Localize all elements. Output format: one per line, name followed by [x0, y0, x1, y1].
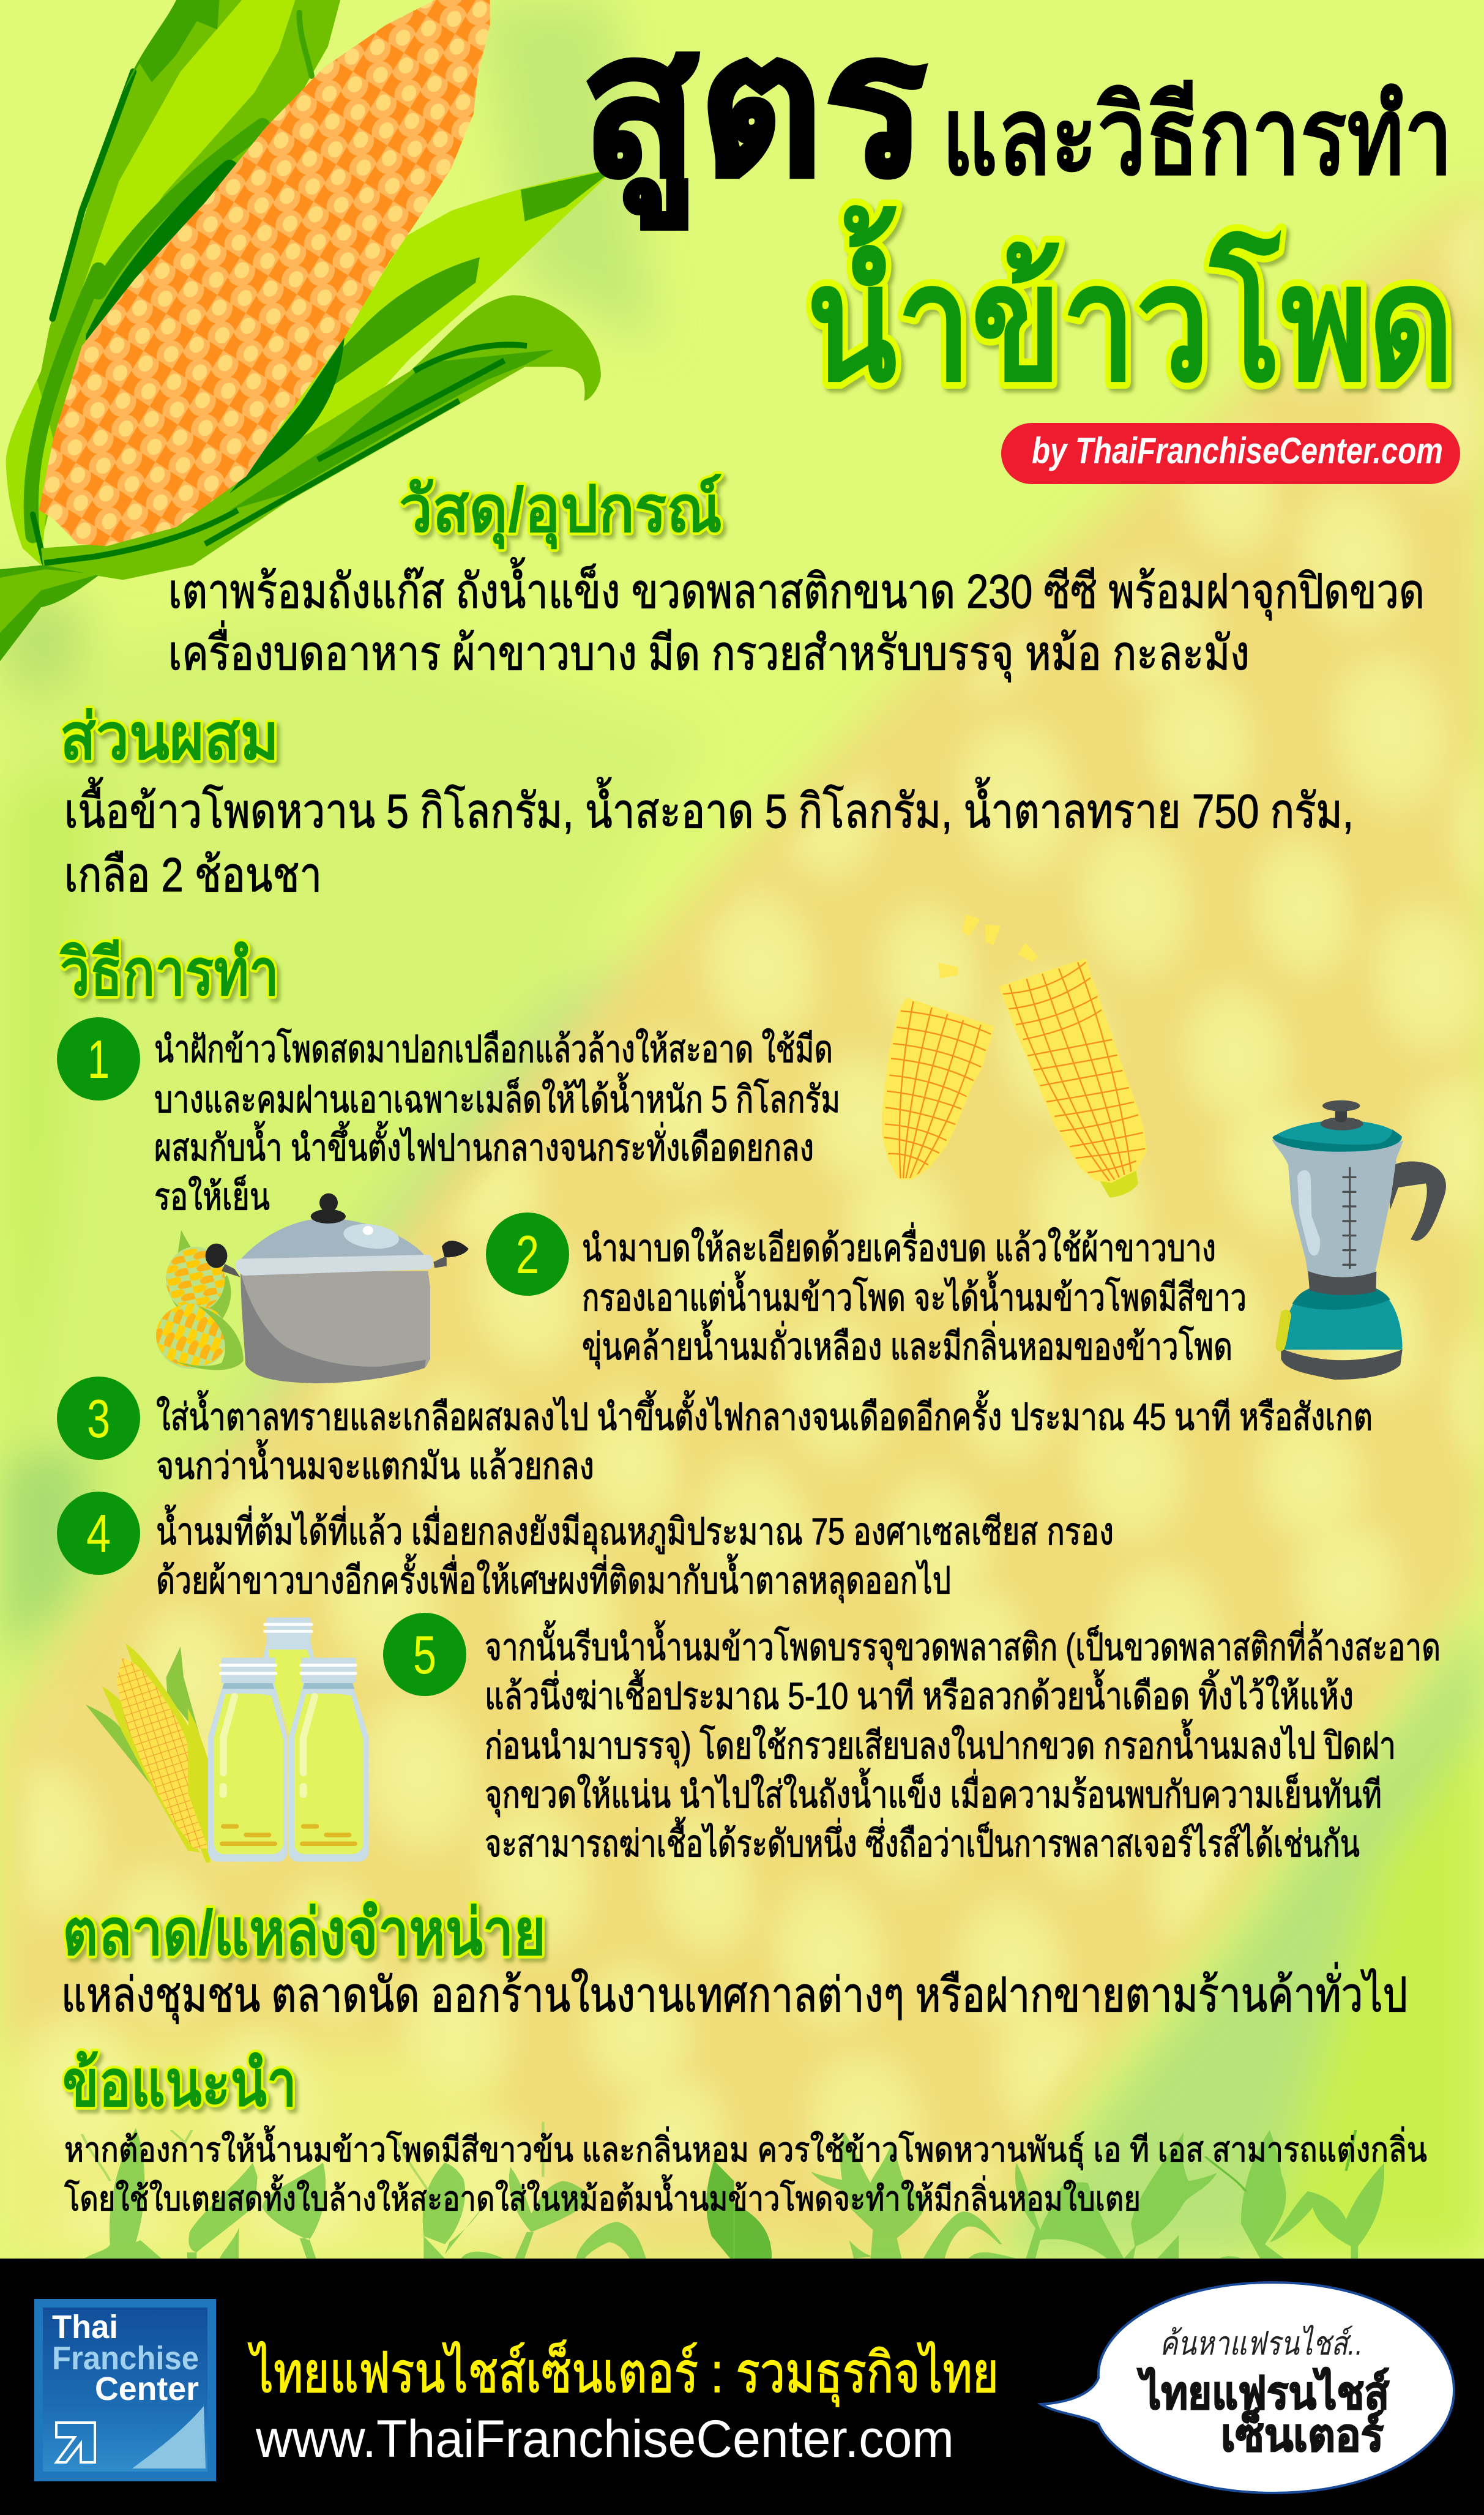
step 4 text: น้ำนมที่ต้มได้ที่แล้ว เมื่อยกลงยังมีอุณหภูมิประมาณ 75 องศาเซลเซียส กรอง	[156, 1504, 1114, 1554]
icon: pot with corn	[156, 1194, 469, 1383]
footer slogan: ไทยแฟรนไชส์เซ็นเตอร์ : รวมธุรกิจไทย	[247, 2339, 999, 2407]
step 5 badge	[383, 1613, 466, 1696]
corn behind pot	[156, 1230, 244, 1370]
corn piece right	[1001, 960, 1146, 1198]
step 4 badge	[57, 1492, 140, 1575]
step 4 badge: 4	[86, 1503, 111, 1564]
dark husk strips	[31, 13, 311, 563]
footer panel	[0, 2259, 1484, 2515]
text: ingredients: เกลือ 2 ช้อนชา	[64, 848, 322, 902]
plants right	[734, 2130, 1384, 2259]
step 2 text: ขุ่นคล้ายน้ำนมถั่วเหลือง และมีกลิ่นหอมของข้าวโพด	[582, 1320, 1232, 1369]
step 1 badge: 1	[88, 1029, 110, 1089]
heading: equipment: วัสดุ/อุปกรณ์	[399, 474, 722, 550]
husk and cob	[86, 1643, 210, 1863]
step 3 text: จนกว่าน้ำนมจะแตกมัน แล้วยกลง	[156, 1439, 594, 1487]
icon: blender	[1272, 1101, 1446, 1380]
step 1 badge	[57, 1017, 140, 1101]
step 2 text: นำมาบดให้ละเอียดด้วยเครื่องบด แล้วใช้ผ้าขาวบาง	[582, 1222, 1216, 1269]
step 1	[57, 1017, 840, 1217]
step 2 text	[582, 1222, 1247, 1369]
icon: cut corn	[883, 914, 1146, 1198]
speech bubble: ไทยแฟรนไชส์	[1137, 2366, 1390, 2418]
byline badge	[1001, 423, 1460, 484]
step 3	[57, 1377, 1373, 1487]
text: equipment	[168, 557, 1425, 682]
heading: ingredients: ส่วนผสม	[60, 701, 279, 773]
logo	[34, 2299, 216, 2481]
step 2	[486, 1213, 1247, 1369]
logo: Franchise	[52, 2340, 199, 2377]
loose kernels	[938, 914, 1038, 978]
speech bubble: เซ็นเตอร์	[1221, 2408, 1384, 2461]
step 2 text: กรองเอาแต่น้ำนมข้าวโพด จะได้น้ำนมข้าวโพดมีสีขาว	[582, 1271, 1247, 1318]
bottle 1	[208, 1657, 288, 1862]
footer url: www.ThaiFranchiseCenter.com	[255, 2410, 954, 2468]
top dark leaf	[123, 0, 219, 93]
text: equipment: เครื่องบดอาหาร ผ้าขาวบาง มีด กรวยสำหรับบรรจุ หม้อ กะละมัง	[168, 621, 1250, 682]
bottle 2	[289, 1657, 369, 1862]
step 1 text: นำฝักข้าวโพดสดมาปอกเปลือกแล้วล้างให้สะอาด ใช้มีด	[154, 1028, 833, 1070]
step 5 text	[485, 1620, 1441, 1864]
icon: corn and bottles	[86, 1618, 369, 1863]
step 3 text	[156, 1390, 1373, 1487]
step 3 badge	[57, 1377, 140, 1460]
text: advice: โดยใช้ใบเตยสดทั้งใบล้างให้สะอาดใส่ในหม้อต้มน้ำนมข้าวโพดจะทำให้มีกลิ่นหอมใบเตย	[64, 2175, 1141, 2218]
step 4 text: ด้วยผ้าขาวบางอีกครั้งเพื่อให้เศษผงที่ติดมากับน้ำตาลหลุดออกไป	[156, 1553, 951, 1603]
back bottle	[263, 1618, 314, 1736]
step 2 badge: 2	[516, 1224, 539, 1285]
step 2 badge	[486, 1213, 569, 1296]
corn piece left	[883, 1000, 993, 1179]
step 5	[383, 1613, 1441, 1864]
text: advice	[64, 2126, 1427, 2218]
logo: Thai	[52, 2309, 118, 2345]
title line 1: สูตร	[581, 0, 927, 230]
left husk	[6, 0, 340, 544]
speech bubble	[1041, 2282, 1454, 2493]
step 3 badge: 3	[87, 1388, 110, 1449]
heading: method: วิธีการทำ	[59, 937, 279, 1009]
front leaf	[229, 169, 615, 493]
plants left	[82, 2122, 734, 2259]
title line 1	[581, 0, 1453, 230]
heading: advice: ข้อแนะนำ	[62, 2048, 297, 2120]
text: ingredients	[64, 777, 1354, 902]
logo: Center	[95, 2371, 199, 2407]
step 1 text: บางและคมฝานเอาเฉพาะเมล็ดให้ได้น้ำหนัก 5 กิโลกรัม	[154, 1072, 840, 1120]
lime stripe	[65, 0, 295, 337]
step 1 text	[154, 1028, 840, 1217]
background corn plants	[82, 2122, 1384, 2259]
step 1 text: รอให้เย็น	[154, 1175, 270, 1217]
illustration: corn cob with husk	[0, 0, 615, 661]
heading: market: ตลาด/แหล่งจำหน่าย	[62, 1897, 546, 1968]
step 5 badge: 5	[413, 1624, 436, 1685]
step 1 text: ผสมกับน้ำ นำขึ้นตั้งไฟปานกลางจนกระทั่งเดือดยกลง	[154, 1121, 814, 1168]
curled leaf	[41, 295, 601, 580]
stem base	[0, 565, 99, 661]
speech bubble: ค้นหาแฟรนไชส์..	[1160, 2325, 1363, 2362]
step 4 text	[156, 1504, 1114, 1603]
cob	[39, 0, 490, 546]
step 4	[57, 1492, 1114, 1603]
